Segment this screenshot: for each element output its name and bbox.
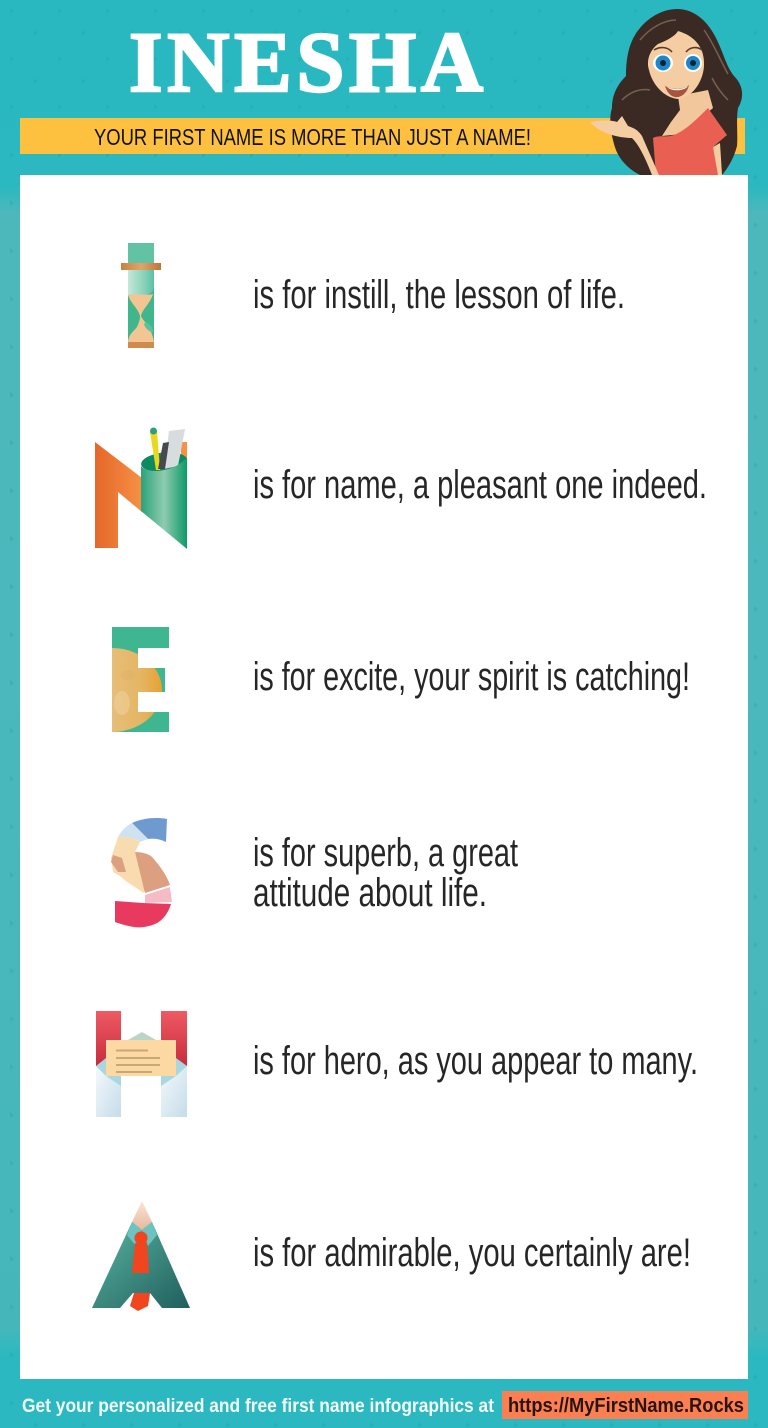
banner: YOUR FIRST NAME IS MORE THAN JUST A NAME! (94, 124, 531, 150)
row S (111, 818, 518, 927)
mouth (665, 85, 689, 97)
title: INESHA (129, 14, 483, 110)
text: S (253, 831, 518, 915)
footer (22, 1391, 748, 1419)
brows (654, 48, 702, 52)
row E (62, 627, 690, 732)
icon: hourglass letter I (121, 243, 161, 348)
text: I: is for instill, the lesson of life. (253, 273, 625, 317)
row H (96, 1011, 698, 1117)
arm and hand (590, 116, 659, 175)
row I (121, 243, 625, 348)
banner (20, 118, 745, 154)
row N (95, 428, 707, 549)
hair (610, 9, 742, 175)
icon: envelope letter H (96, 1011, 187, 1117)
text: S: attitude about life. (253, 871, 487, 915)
text: S: is for superb, a great (253, 831, 518, 875)
icon: moon letter E (112, 627, 169, 732)
illustration: woman presenting (590, 9, 742, 175)
neck and chest (662, 90, 713, 136)
row A (92, 1201, 691, 1311)
panel: white content (20, 175, 748, 1379)
icon: handshake letter S (111, 818, 172, 927)
face (648, 31, 704, 99)
footer text: Get your personalized and free first name infographics at (22, 1396, 495, 1417)
shirt (653, 108, 727, 175)
icon: pen cup letter N (95, 428, 188, 549)
icon: suit and tie letter A (92, 1201, 190, 1311)
url badge: https://MyFirstName.Rocks (508, 1395, 744, 1417)
eyes (653, 54, 702, 72)
